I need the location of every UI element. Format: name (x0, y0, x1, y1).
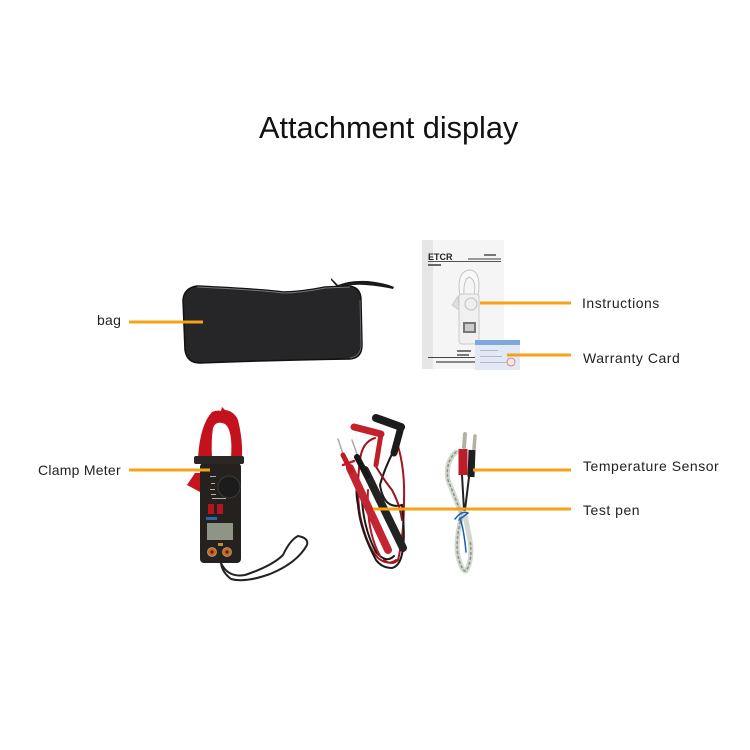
label: test pen: Test pen (583, 502, 640, 518)
callout line: bag (129, 320, 203, 324)
icon: test leads (338, 418, 404, 568)
icon: warranty card (475, 340, 520, 370)
manual brand: ETCR (428, 252, 453, 262)
cables (384, 446, 404, 563)
icon: black zipper bag (183, 278, 394, 363)
brand strip (206, 517, 217, 520)
label: instructions: Instructions (582, 295, 660, 311)
callout line: instructions (480, 302, 571, 304)
icon: clamp meter (187, 407, 307, 580)
braided wire (447, 452, 471, 571)
red angled plug (354, 427, 381, 434)
icon: temperature sensor (447, 434, 475, 571)
label: bag: bag (97, 312, 121, 328)
black plug (471, 450, 472, 477)
meter body (200, 463, 241, 563)
input jacks (208, 548, 216, 556)
red clamp jaw (198, 407, 242, 458)
red buttons (208, 504, 214, 514)
callout line: test pen (373, 508, 571, 510)
red plug (458, 449, 468, 475)
sensor leads (462, 475, 469, 510)
collar (194, 456, 244, 464)
blue twist tie (455, 512, 468, 552)
title: Attachment display (259, 110, 519, 145)
probe needles (338, 439, 343, 454)
banana pins (464, 434, 465, 447)
label: warranty card: Warranty Card (583, 350, 680, 366)
label: temperature sensor: Temperature Sensor (583, 458, 719, 474)
rotary dial (218, 476, 240, 498)
label: clamp meter: Clamp Meter (38, 462, 121, 478)
icon: instruction manual (422, 240, 504, 369)
black angled plug (376, 418, 401, 427)
LCD (207, 523, 233, 540)
red probe (350, 468, 388, 550)
callout line: clamp meter (129, 468, 210, 472)
dial labels (210, 476, 226, 499)
red trigger (187, 473, 201, 492)
manual meter drawing (452, 270, 479, 344)
callout line: temperature sensor (473, 468, 571, 472)
black probe (365, 470, 403, 548)
callout line: warranty card (507, 354, 571, 356)
wrist strap (221, 536, 307, 580)
